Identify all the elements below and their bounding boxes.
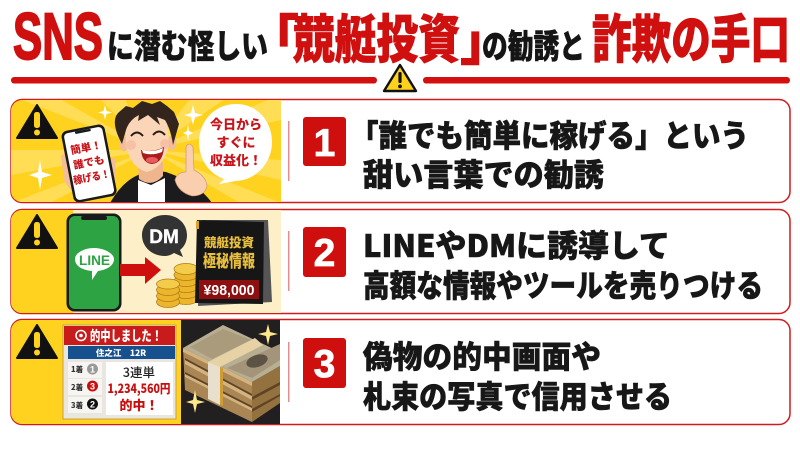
- illustration: promoter with phone: 収益化！: [210, 150, 262, 169]
- fake win card: 2着: [71, 382, 84, 393]
- phone: 簡単！: [69, 137, 103, 158]
- title underline left: [11, 77, 377, 84]
- fake win card: 1,234,560円: [108, 378, 170, 397]
- icon: warning 3: [17, 325, 57, 358]
- fake win card: 住之江 12R: [96, 347, 146, 359]
- title: SNS: [13, 0, 103, 73]
- phone: 誰でも: [72, 152, 106, 173]
- step 1 text: [350, 111, 749, 195]
- title: の勧誘と: [482, 20, 585, 68]
- number badge 1: 1: [314, 122, 335, 165]
- title: に潜む怪しい: [107, 20, 268, 68]
- icon: warning 2: [17, 215, 57, 248]
- step 2 text: LINEやDMに誘導して: [363, 221, 670, 266]
- icon: warning 1: [17, 105, 57, 138]
- fake win card: 3着: [71, 400, 84, 411]
- step 3 text: 札束の写真で信用させる: [363, 372, 672, 417]
- fake win card: 的中しました！: [90, 326, 162, 346]
- number badge 3: 3: [314, 343, 335, 386]
- coins: [156, 264, 198, 308]
- mouth: [141, 147, 164, 164]
- illustration: promoter with phone: [11, 99, 281, 204]
- DM bubble: DM: [149, 227, 179, 248]
- fake win card: 3連単: [123, 362, 155, 381]
- DM bubble: [142, 215, 187, 257]
- step 2 text: [363, 221, 763, 306]
- title: 競艇投資: [293, 0, 460, 73]
- fake win card: 3: [90, 382, 95, 392]
- panel: step 3: [11, 319, 790, 425]
- pointing hand: [175, 144, 207, 196]
- book: [195, 220, 272, 306]
- phone: [61, 123, 118, 204]
- illustration: LINE to paid info: [11, 209, 281, 314]
- phone: 稼げる！: [72, 166, 111, 188]
- illustration: promoter with phone: 今日から: [210, 114, 262, 133]
- icon: title warning triangle: [384, 65, 416, 91]
- fake win card: [63, 325, 176, 419]
- number badge 1: [303, 117, 346, 166]
- number badge 3: [303, 338, 346, 388]
- panel: step 2: [11, 209, 790, 314]
- divider 1: [288, 121, 290, 181]
- eyes: [131, 132, 165, 136]
- sparkles: [29, 105, 203, 190]
- number badge 2: 2: [314, 232, 335, 275]
- neck: [138, 162, 163, 183]
- title underline right: [423, 77, 790, 84]
- step 1 text: 「誰でも簡単に稼げる」という: [350, 111, 749, 156]
- cash stacks: [183, 324, 280, 422]
- arrow: [120, 257, 161, 284]
- fake win card: 1着: [71, 364, 84, 375]
- title: 「: [247, 0, 299, 73]
- step 3 text: 偽物の的中画面や: [363, 332, 601, 377]
- fake win card: 2: [90, 400, 95, 410]
- fake win card: 的中！: [119, 395, 159, 414]
- fake win card: 1: [90, 364, 95, 374]
- divider 2: [288, 231, 290, 291]
- illustration: promoter with phone: すぐに: [216, 132, 256, 151]
- phone: LINE: [79, 252, 110, 268]
- left hand: [61, 154, 72, 191]
- title: [13, 0, 790, 75]
- phone: [66, 214, 122, 312]
- title: 」: [460, 0, 512, 75]
- face: [125, 114, 169, 172]
- book: 極秘情報: [203, 247, 255, 272]
- illustration: fake win screen and cash: [11, 319, 280, 425]
- sparkles: [186, 324, 278, 413]
- step 3 text: [363, 332, 672, 417]
- ears: [120, 136, 127, 152]
- book: ¥98,000: [204, 282, 254, 299]
- jacket: [110, 170, 212, 203]
- speech bubble: [199, 104, 272, 184]
- divider 3: [288, 342, 290, 402]
- panel: step 1: [11, 99, 790, 204]
- step 1 text: 甜い言葉での勧誘: [363, 150, 604, 195]
- book: 競艇投資: [204, 232, 254, 251]
- number badge 2: [303, 227, 346, 277]
- hair: [115, 101, 179, 145]
